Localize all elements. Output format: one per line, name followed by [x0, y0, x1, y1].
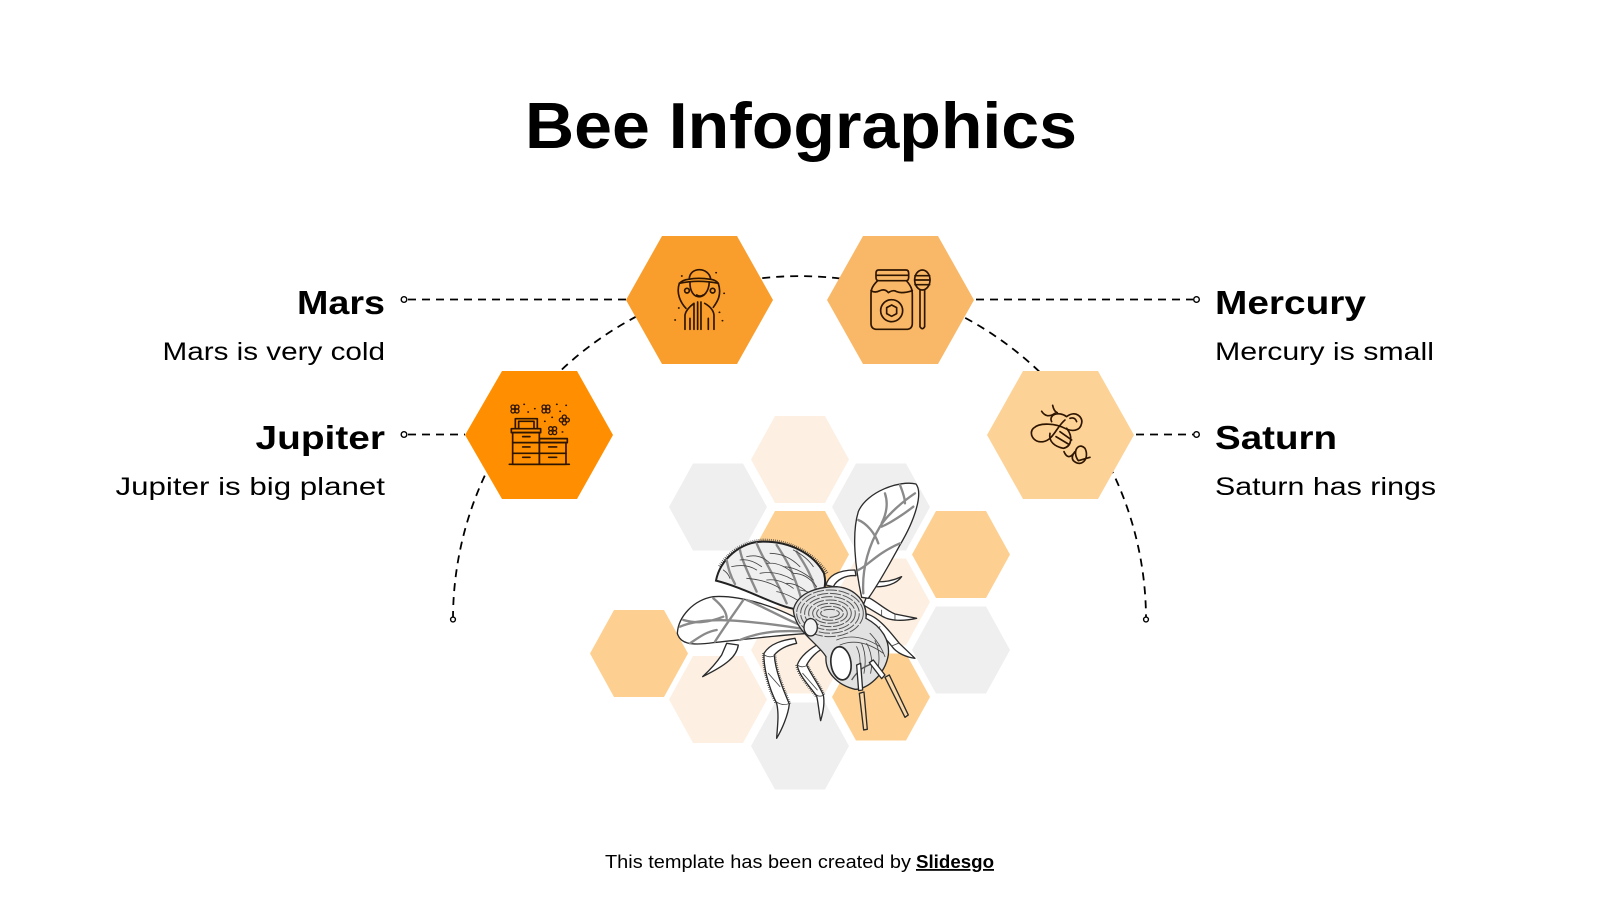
icon: line-art bee	[1031, 405, 1090, 463]
hexagon panel: Jupiter beehive	[465, 371, 613, 499]
bee illustration	[677, 483, 919, 738]
text block: Saturn	[1215, 419, 1436, 501]
hexagon panel: Mercury honey jar	[827, 236, 974, 364]
text block: Jupiter: Jupiter is big planet	[116, 473, 385, 501]
text block: Mercury	[1215, 284, 1434, 366]
title: Bee Infographics	[525, 89, 1077, 162]
icon: beekeeper	[675, 270, 724, 329]
mouthparts	[857, 660, 908, 730]
icon: honey jar and dipper	[871, 270, 930, 329]
footer credit: This template has been created by	[605, 852, 911, 872]
abdomen	[716, 541, 827, 609]
icon: beehive boxes	[509, 404, 569, 464]
connector: Jupiter	[401, 432, 465, 437]
hexagon panel: Mars beekeeper	[626, 236, 773, 364]
connector: Mercury	[976, 297, 1199, 302]
text block: Jupiter	[116, 419, 385, 501]
dashed arc connecting the hexagons	[451, 276, 1148, 622]
honeycomb cluster	[590, 416, 1010, 790]
connector: Saturn	[1136, 432, 1199, 437]
text block: Jupiter: Jupiter	[256, 419, 385, 456]
hexagon panel: Saturn bee	[987, 371, 1134, 499]
legs	[703, 570, 917, 738]
footer credit: Slidesgo	[916, 852, 994, 872]
text block: Mars	[162, 284, 385, 366]
text block: Mercury: Mercury is small	[1215, 338, 1434, 366]
connector: Mars	[401, 297, 626, 302]
upper wing	[855, 483, 919, 598]
lower wing	[677, 596, 810, 644]
text block: Mars: Mars	[297, 284, 385, 321]
text block: Saturn: Saturn	[1215, 419, 1337, 456]
thorax and head	[793, 587, 889, 689]
text block: Mercury: Mercury	[1215, 284, 1367, 321]
text block: Mars: Mars is very cold	[162, 338, 385, 366]
text block: Saturn: Saturn has rings	[1215, 473, 1436, 501]
